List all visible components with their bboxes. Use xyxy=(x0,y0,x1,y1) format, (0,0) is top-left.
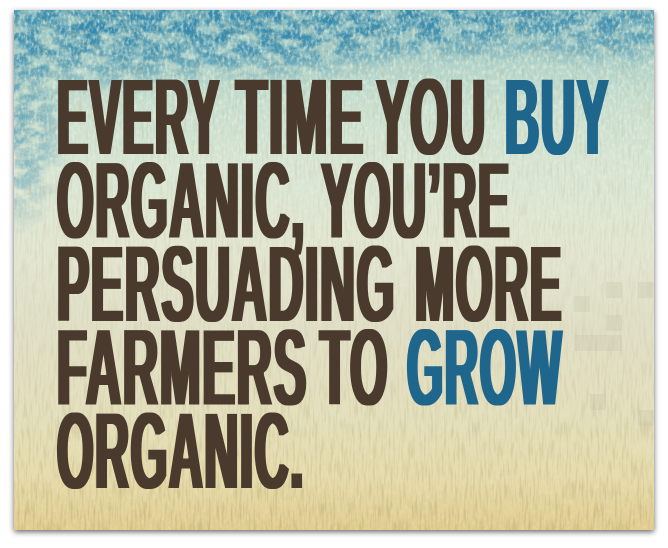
line 1: every time you buy: TIME xyxy=(236,56,365,179)
line 4: farmers to grow: TO xyxy=(320,306,389,430)
faint checker squares on the right xyxy=(574,282,654,426)
headline xyxy=(57,56,610,513)
headline: ORGANIC. xyxy=(57,390,305,513)
line 1: every time you buy: EVERY xyxy=(57,56,221,179)
line 4: farmers to grow: FARMERS xyxy=(57,306,308,430)
line 2: organic, you're: ORGANIC, xyxy=(57,140,306,262)
line 1: every time you buy: YOU xyxy=(376,56,487,179)
